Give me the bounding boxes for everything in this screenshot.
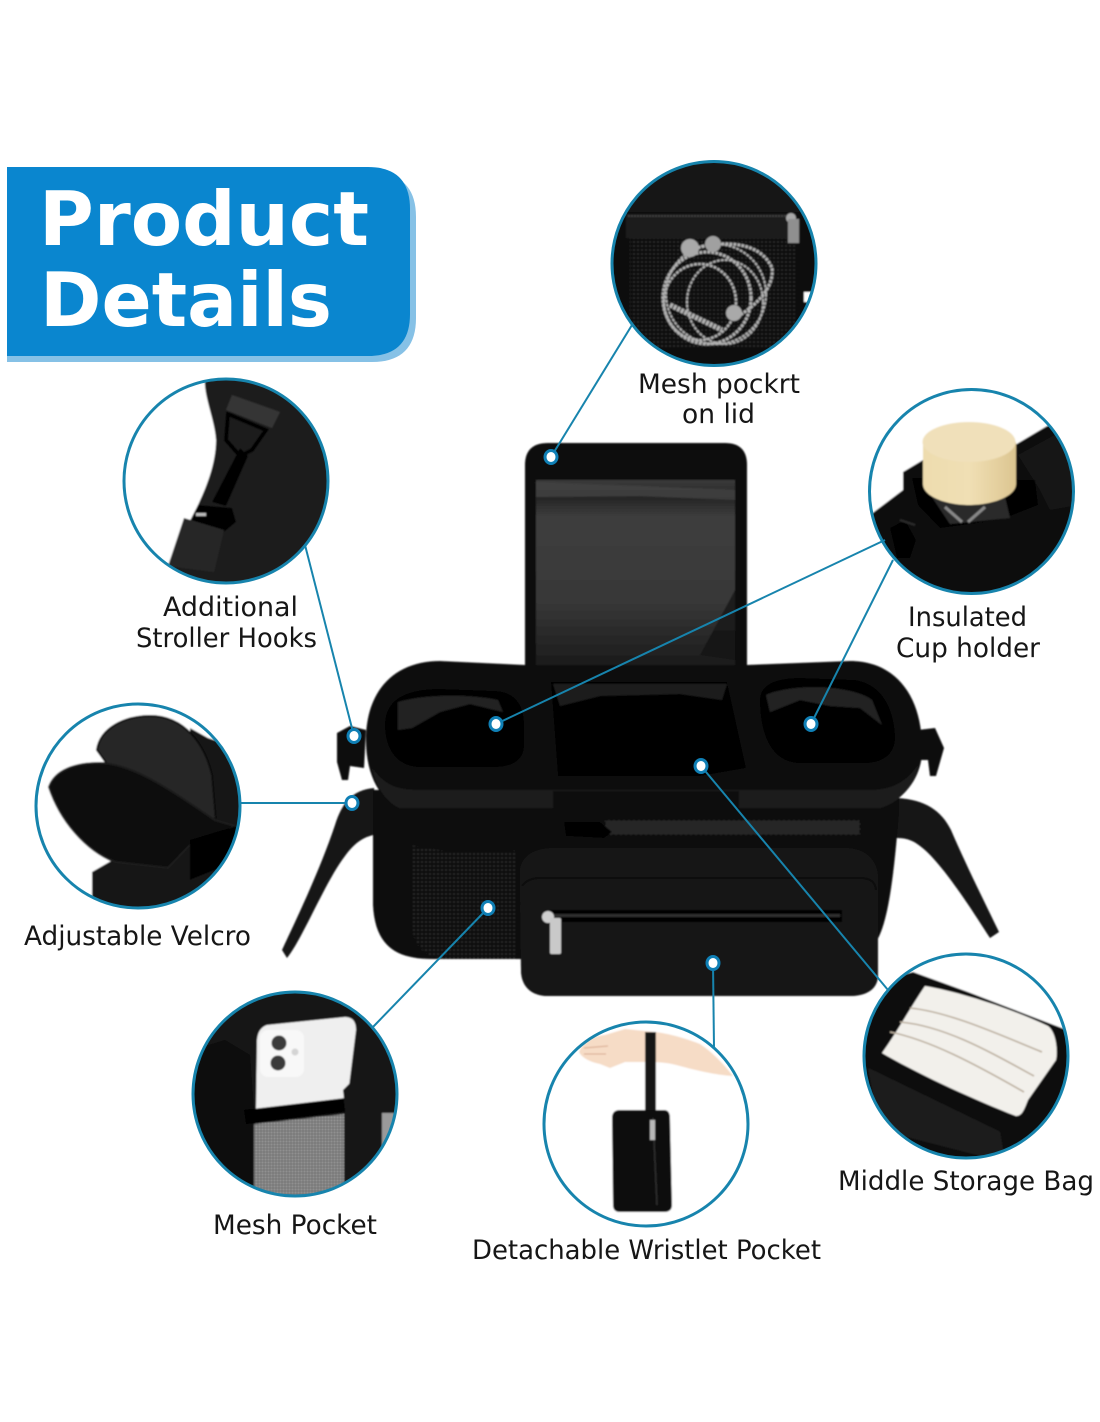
label: insulated cup holder: Cup holder [896,633,1040,664]
circle: insulated cup holder [868,388,1078,600]
back strap [92,728,245,915]
circle: detachable wristlet pocket [543,1020,751,1228]
upper velcro flap [97,716,216,822]
label: mesh pocket: Mesh Pocket [213,1210,377,1241]
cup holder inner [912,478,1038,528]
title text [39,176,369,344]
main product: stroller organizer bag [282,443,999,996]
bottom band [868,1068,1005,1162]
bag rim with cup holders [366,661,922,808]
circle: middle storage bag with diapers [862,952,1072,1162]
label: middle storage bag: Middle Storage Bag [838,1166,1094,1197]
lid [525,443,747,668]
wrist strap [645,1032,656,1112]
middle storage opening [551,682,746,776]
lid inner lining [536,480,735,665]
lower strap [168,518,224,572]
side strap [890,520,916,558]
diapers [882,986,1057,1116]
pouch [612,1110,672,1212]
earphone cables [663,236,772,344]
label: mesh pocket on lid: on lid [682,399,755,430]
title text: Details [40,257,332,344]
silver zipper pull [542,911,561,954]
title text: Product [39,176,369,263]
front zipper [545,910,842,922]
callout dots [346,450,817,970]
side strip [342,1084,350,1112]
zipper pull [786,213,799,243]
label: additional stroller hooks [136,592,317,654]
connector lines [240,325,893,1048]
buckle [190,505,236,532]
label: mesh pocket on lid: Mesh pockrt [638,369,800,400]
label: additional stroller hooks: Stroller Hooks [136,623,317,654]
left stroller hook [337,726,366,780]
D-ring [226,414,266,456]
side mesh pocket [411,845,517,959]
label: insulated cup holder: Insulated [908,602,1027,633]
label: mesh pocket on lid [638,369,800,430]
right stroller hook [918,728,944,776]
grey mesh [254,1114,344,1200]
circle: mesh pocket with phone [192,990,400,1200]
label: additional stroller hooks: Additional [163,592,298,623]
left wing strap [282,788,378,958]
arm and fist [579,1029,733,1076]
bottle cap [922,422,1016,505]
velcro patch [553,791,739,815]
lower velcro flap [49,763,236,868]
front detachable pocket [520,848,878,996]
circle: additional stroller hooks [122,377,332,590]
title banner [7,167,416,362]
label: detachable wristlet pocket: Detachable Wristlet Pocket [472,1235,821,1266]
pocket band [244,1098,346,1124]
right wing strap [893,798,999,938]
top webbing [226,395,280,428]
circle: mesh pocket on lid [610,160,820,370]
silver zipper pull [382,1113,394,1147]
large zipper [560,820,860,850]
circle: adjustable velcro [34,702,245,915]
bag body [373,790,899,959]
right cup holder [760,678,895,763]
left cup holder [385,689,524,767]
label: insulated cup holder [896,602,1040,664]
lid velcro strip [534,453,736,483]
phone [256,1017,356,1110]
label: adjustable velcro: Adjustable Velcro [24,921,251,952]
hook rod [212,448,248,506]
